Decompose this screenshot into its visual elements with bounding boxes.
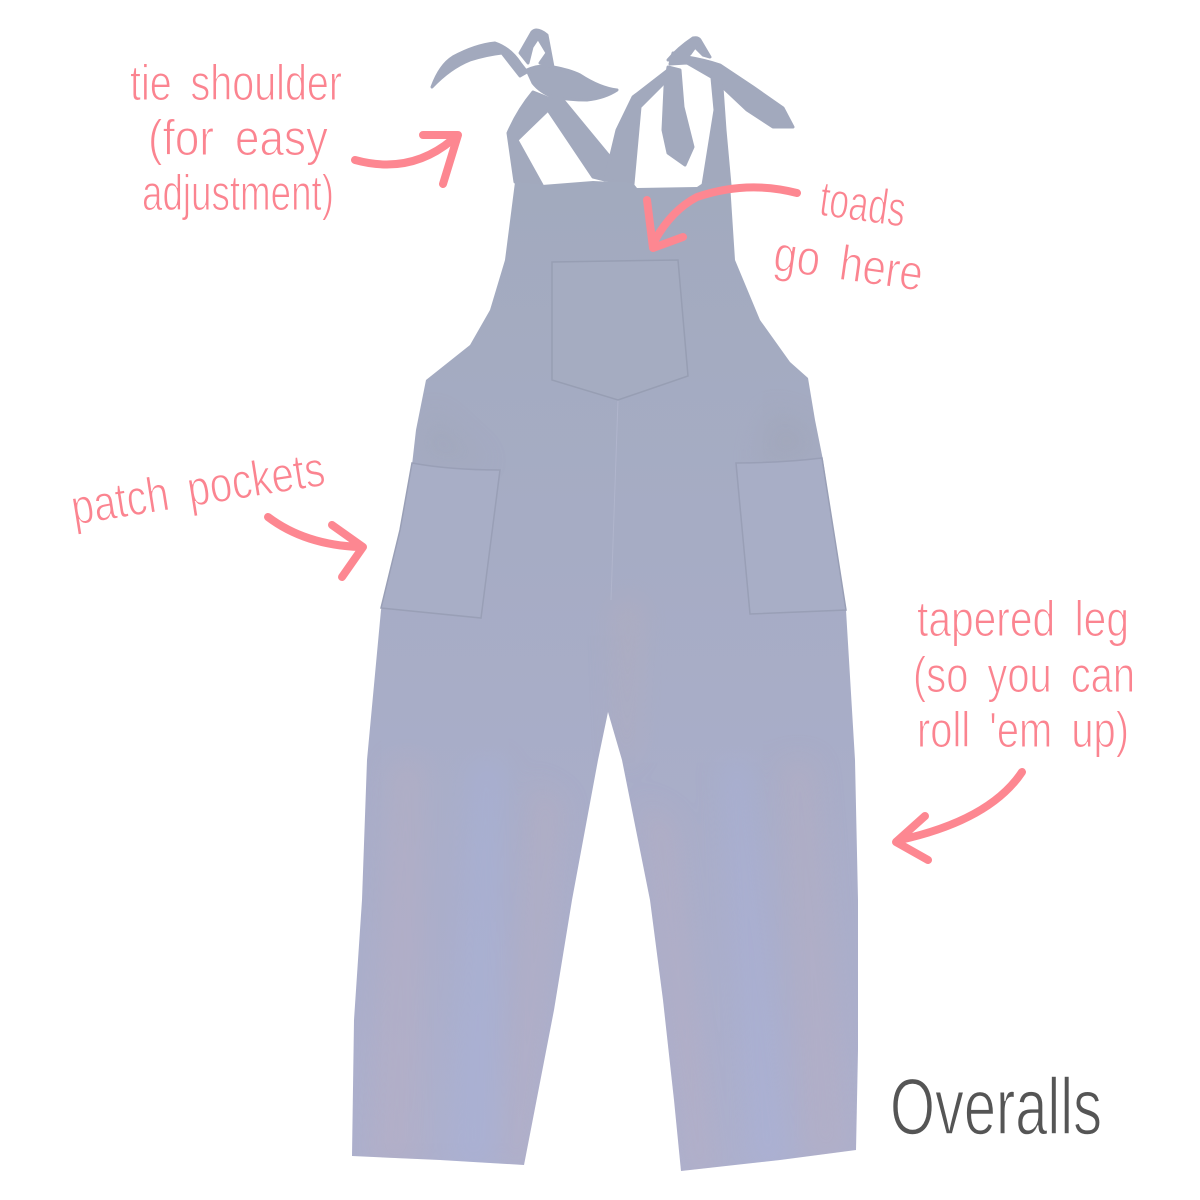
straps and ties (432, 30, 793, 185)
bib pocket (552, 260, 688, 400)
label: toads go here: go here (770, 225, 927, 302)
arrow: to side pocket (268, 517, 363, 577)
body silhouette (352, 181, 858, 1171)
fabric wrinkles (370, 410, 850, 1180)
label: toads go here (770, 170, 927, 302)
arrow: to trouser leg (896, 772, 1022, 860)
right patch pocket (736, 458, 846, 614)
label: tie shoulder (130, 55, 342, 221)
label: tie shoulder: adjustment) (142, 165, 334, 221)
label: tapered leg: (so you can (913, 647, 1135, 703)
title: Overalls: Overalls (890, 1062, 1102, 1151)
label: tapered leg: roll 'em up) (917, 702, 1129, 758)
label: patch pockets: patch pockets (67, 441, 329, 536)
overalls garment (352, 30, 858, 1180)
label: toads go here: toads (816, 170, 909, 238)
left patch pocket (381, 463, 500, 618)
label: tapered leg (913, 591, 1135, 758)
label: tie shoulder: (for easy (148, 110, 328, 166)
label: tie shoulder: tie shoulder (130, 55, 342, 111)
arrow: to bib pocket (647, 187, 797, 248)
arrow: to shoulder tie (355, 135, 458, 184)
center seam (611, 400, 618, 600)
label: tapered leg: tapered leg (917, 591, 1129, 647)
